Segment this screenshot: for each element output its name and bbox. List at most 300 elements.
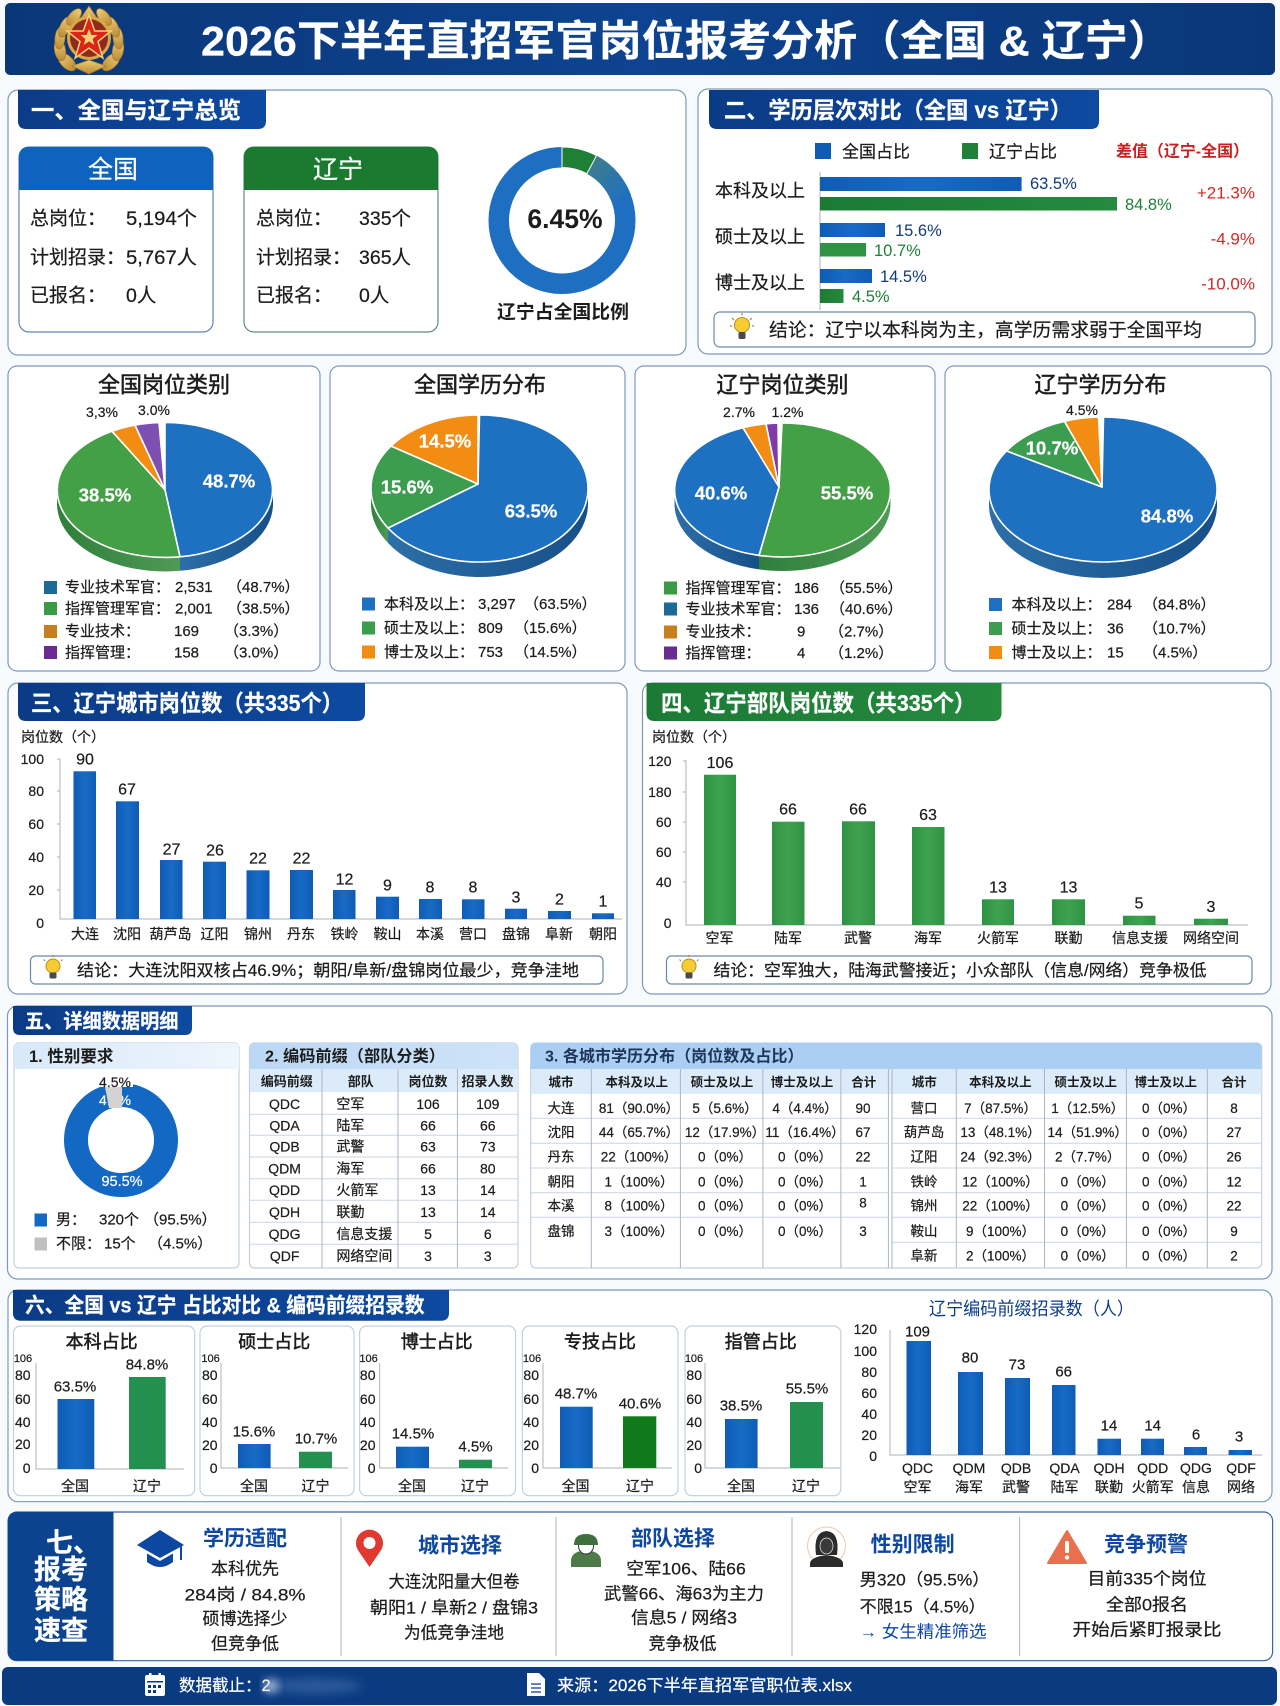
bar chart: Liaoning recruitment by code prefix: 40 bbox=[861, 1406, 877, 1422]
chart card: command share: 指管占比 bbox=[725, 1332, 797, 1352]
sub-panel: city education table: 81（90.0%） bbox=[599, 1101, 679, 1116]
card: national totals: 计划招录： bbox=[30, 246, 125, 268]
panel: national education distribution pie bbox=[330, 366, 625, 671]
sub-panel: code prefix table: 武警 bbox=[336, 1139, 364, 1155]
chart card: master share: 15.6% bbox=[233, 1424, 275, 1440]
card: national totals: 已报名： bbox=[30, 284, 106, 306]
bar chart: Liaoning recruitment by code prefix: 陆军 bbox=[1050, 1479, 1078, 1495]
bar chart: Liaoning recruitment by code prefix: QDD bbox=[1137, 1460, 1168, 1476]
bar chart: force job counts: 3 bbox=[1207, 899, 1216, 916]
donut chart: gender: 4.5% bbox=[99, 1074, 131, 1090]
sub-panel: code prefix table: 63 bbox=[420, 1139, 436, 1155]
chart card: doctor share: 106 bbox=[359, 1353, 378, 1365]
sub-panel: city education table: 0（0%） bbox=[1142, 1101, 1196, 1116]
sub-panel: city education table: 2（100%） bbox=[966, 1248, 1035, 1264]
bar chart: Liaoning recruitment by code prefix: 66 bbox=[1055, 1364, 1072, 1380]
pie chart: national education: 15.6% bbox=[381, 476, 433, 498]
icon: location pin bbox=[356, 1530, 383, 1567]
bar chart: Liaoning recruitment by code prefix: QDF bbox=[1226, 1460, 1256, 1476]
chart card: doctor share: 博士占比 bbox=[401, 1332, 473, 1352]
sub-panel: city education table: 22 bbox=[855, 1150, 871, 1164]
legend: national job categories: （48.7%） bbox=[227, 579, 300, 596]
chart card: master share: 40 bbox=[202, 1414, 218, 1430]
column: force choice: 空军106、陆66 bbox=[626, 1560, 746, 1578]
column: city choice: 朝阳1 / 阜新2 / 盘锦3 bbox=[370, 1598, 538, 1618]
panel: share comparison and code prefix recruitment bbox=[8, 1290, 1272, 1502]
chart card: bachelor share: 80 bbox=[15, 1367, 31, 1383]
sub-panel: gender requirement bbox=[14, 1043, 239, 1268]
bar chart: city job counts: 大连 bbox=[71, 926, 99, 942]
donut chart: gender: 4.5% bbox=[99, 1092, 131, 1108]
pie chart: national job categories: 3.0% bbox=[138, 402, 170, 418]
panel: Liaoning job categories pie bbox=[635, 366, 935, 671]
sub-panel: city education table: 1 bbox=[859, 1174, 867, 1190]
legend: Liaoning education: 36 bbox=[1107, 620, 1124, 638]
legend: national education: 本科及以上： bbox=[384, 596, 474, 613]
sub-panel: code prefix table: 13 bbox=[420, 1182, 436, 1198]
heading: section two bbox=[709, 90, 1099, 129]
bar chart: city job counts: 本溪 bbox=[416, 926, 444, 942]
sub-panel: city education table: 本科及以上 bbox=[969, 1075, 1032, 1090]
column: competition warning: 目前335个岗位 bbox=[1088, 1570, 1206, 1588]
donut chart: gender: 95.5% bbox=[101, 1174, 143, 1190]
bar chart: Liaoning recruitment by code prefix: 14 bbox=[1144, 1418, 1161, 1434]
card: Liaoning totals: 辽宁 bbox=[313, 156, 363, 184]
sub-panel: code prefix table: 66 bbox=[480, 1117, 496, 1133]
icon: light bulb bbox=[730, 313, 754, 339]
sub-panel: city education table: 8（100%） bbox=[604, 1198, 674, 1214]
column: competition warning: 竞争预警 bbox=[1104, 1534, 1188, 1556]
legend: national job categories: 169 bbox=[174, 623, 199, 640]
panel: education level comparison bbox=[698, 89, 1272, 354]
panel: Liaoning city job counts bbox=[8, 683, 627, 994]
chart card: technical share: 60 bbox=[523, 1391, 539, 1407]
chart card: bachelor share: 全国 bbox=[61, 1478, 89, 1494]
sub-panel: gender requirement: 1. 性别要求 bbox=[29, 1047, 114, 1066]
bar chart: city job counts: 铁岭 bbox=[330, 926, 358, 942]
sub-panel: code prefix table: 2. 编码前缀（部队分类） bbox=[265, 1046, 445, 1066]
chart card: doctor share: 0 bbox=[368, 1460, 376, 1476]
sub-panel: city education table: 22 bbox=[1226, 1198, 1242, 1214]
sub-panel: city education table: 0（0%） bbox=[1142, 1248, 1196, 1264]
legend: national education: （63.5%） bbox=[524, 596, 597, 613]
bar chart: Liaoning recruitment by code prefix: 武警 bbox=[1002, 1479, 1030, 1495]
panel: detailed data bbox=[8, 1006, 1272, 1279]
sub-panel: code prefix table: QDG bbox=[269, 1226, 301, 1242]
sub-panel: city education table: 5（5.6%） bbox=[692, 1101, 758, 1116]
bar chart: force job counts bbox=[648, 753, 1248, 946]
sub-panel: city education table: 0（0%） bbox=[778, 1174, 832, 1190]
bar chart: city job counts: 8 bbox=[426, 880, 435, 896]
sub-panel: city education table: 0（0%） bbox=[1142, 1150, 1196, 1164]
pie chart: Liaoning education: 10.7% bbox=[1026, 438, 1078, 458]
bar chart: city job counts: 盘锦 bbox=[502, 926, 530, 942]
pie chart: Liaoning education bbox=[989, 402, 1217, 578]
chart card: technical share: 106 bbox=[523, 1353, 541, 1365]
donut chart: Liaoning share: 6.45% bbox=[527, 204, 603, 234]
legend: national education: 809 bbox=[478, 620, 503, 637]
chart card: master share: 硕士占比 bbox=[238, 1332, 310, 1352]
icon: graduation cap bbox=[137, 1530, 184, 1567]
card: Liaoning totals: 365人 bbox=[359, 247, 411, 269]
sub-panel: city education table: 0（0%） bbox=[1142, 1198, 1196, 1214]
column: force choice: 部队选择 bbox=[631, 1528, 715, 1550]
legend: national job categories: 指挥管理军官： bbox=[65, 600, 170, 618]
donut chart: Liaoning share bbox=[499, 147, 631, 284]
bar chart: education comparison: 63.5% bbox=[1030, 175, 1077, 193]
panel: Liaoning force job counts bbox=[642, 683, 1271, 994]
bar chart: city job counts: 40 bbox=[28, 849, 44, 865]
bar chart: city job counts: 葫芦岛 bbox=[150, 926, 192, 942]
bar chart: force job counts: 0 bbox=[664, 915, 672, 931]
chart card: command share: 38.5% bbox=[720, 1398, 762, 1414]
legend: 辽宁占比 bbox=[989, 142, 1057, 162]
chart card: bachelor share: 40 bbox=[15, 1414, 31, 1430]
sub-panel: city education table: 硕士及以上 bbox=[1054, 1075, 1117, 1090]
column: gender limit: 不限15（4.5%） bbox=[860, 1598, 986, 1616]
callout: conclusion on forces bbox=[666, 955, 1252, 984]
bar chart: force job counts: 13 bbox=[1060, 880, 1078, 896]
chart card: command share: 55.5% bbox=[786, 1380, 828, 1398]
chart card: master share: 0 bbox=[210, 1460, 218, 1476]
bar chart: education comparison: 硕士及以上 bbox=[715, 227, 805, 247]
sub-panel: code prefix table: 14 bbox=[480, 1204, 496, 1220]
sub-panel: city education table: 0（0%） bbox=[778, 1150, 832, 1164]
legend: Liaoning education: 博士及以上： bbox=[1012, 644, 1102, 662]
chart card: technical share: 全国 bbox=[562, 1478, 590, 1494]
chart card: bachelor share: 20 bbox=[15, 1436, 31, 1452]
sub-panel: city education table: 0（0%） bbox=[1142, 1125, 1196, 1140]
callout: conclusion on cities: 结论：大连沈阳双核占46.9%；朝阳/阜新/盘锦岗位最少，竞争洼地 bbox=[77, 961, 579, 980]
heading: section seven: 速查 bbox=[34, 1616, 88, 1646]
legend: gender bbox=[34, 1212, 217, 1252]
sub-panel: city education table: 硕士及以上 bbox=[691, 1075, 753, 1090]
bar chart: Liaoning recruitment by code prefix: 80 bbox=[962, 1350, 978, 1366]
legend: Liaoning education bbox=[989, 596, 1216, 662]
column: force choice: 武警66、海63为主力 bbox=[604, 1584, 764, 1604]
axis title: 岗位数（个） bbox=[652, 729, 736, 745]
callout: conclusion on cities bbox=[30, 955, 603, 984]
sub-panel: city education table: 27 bbox=[1226, 1125, 1242, 1140]
sub-panel: code prefix table: 14 bbox=[480, 1182, 496, 1198]
chart card: technical share: 专技占比 bbox=[564, 1332, 636, 1352]
panel: national and Liaoning overview bbox=[8, 90, 686, 355]
chart card: master share: 全国 bbox=[240, 1478, 268, 1494]
bar chart: city job counts: 100 bbox=[21, 751, 44, 767]
legend: national education: 博士及以上： bbox=[384, 644, 474, 661]
legend: gender: 不限： bbox=[56, 1236, 101, 1252]
sub-panel: city education table: 24（92.3%） bbox=[960, 1150, 1041, 1164]
legend: Liaoning job categories: 186 bbox=[794, 580, 819, 597]
sub-panel: city education table: 鞍山 bbox=[910, 1224, 938, 1239]
bar chart: city job counts: 阜新 bbox=[545, 926, 573, 942]
sub-panel: city education table: 阜新 bbox=[910, 1248, 938, 1264]
bar chart: education comparison: 本科及以上 bbox=[715, 181, 805, 201]
bar chart: Liaoning recruitment by code prefix: 0 bbox=[869, 1448, 877, 1464]
bar chart: force job counts: 40 bbox=[656, 874, 672, 890]
data cutoff text: 数据截止：2 bbox=[179, 1676, 271, 1695]
chart card: doctor share: 全国 bbox=[398, 1478, 426, 1494]
column: education fit: 硕博选择少 bbox=[202, 1610, 288, 1628]
sub-panel: city education table: 0（0%） bbox=[698, 1174, 752, 1190]
legend: national job categories: 专业技术军官： bbox=[65, 579, 170, 596]
chart card: doctor share: 20 bbox=[360, 1437, 376, 1453]
sub-panel: city education table: 0（0%） bbox=[778, 1198, 832, 1214]
sub-panel: code prefix table: 岗位数 bbox=[408, 1074, 448, 1089]
sub-panel: code prefix table: 编码前缀 bbox=[261, 1074, 313, 1089]
legend: Liaoning education: （84.8%） bbox=[1143, 596, 1216, 614]
chart card: master share bbox=[200, 1326, 354, 1496]
legend: national job categories: （3.0%） bbox=[224, 644, 288, 662]
bar chart: Liaoning recruitment by code prefix bbox=[854, 1299, 1262, 1495]
column: competition warning: 全部0报名 bbox=[1106, 1596, 1188, 1614]
chart card: master share: 106 bbox=[201, 1353, 220, 1365]
heading: section seven: 策略 bbox=[34, 1585, 88, 1615]
sub-panel: city education table: 朝阳 bbox=[548, 1174, 574, 1190]
sub-panel: code prefix table: 信息支援 bbox=[336, 1226, 392, 1242]
chart card: doctor share bbox=[359, 1326, 516, 1496]
bar chart: education comparison: -10.0% bbox=[1201, 274, 1255, 294]
bar chart: Liaoning recruitment by code prefix: QDG bbox=[1180, 1460, 1212, 1476]
sub-panel: code prefix table: 3 bbox=[484, 1248, 492, 1264]
sub-panel: city education table: 2（7.7%） bbox=[1055, 1150, 1120, 1164]
sub-panel: code prefix table: 6 bbox=[484, 1226, 492, 1242]
heading: section five: 五、详细数据明细 bbox=[25, 1010, 178, 1033]
card: Liaoning totals: 335个 bbox=[359, 208, 411, 230]
legend: Liaoning education: 本科及以上： bbox=[1012, 596, 1102, 614]
legend: gender: 男： bbox=[56, 1212, 86, 1228]
heading: section one: 一、全国与辽宁总览 bbox=[31, 97, 241, 123]
chart card: command share: 80 bbox=[686, 1367, 702, 1383]
column: city choice: 城市选择 bbox=[418, 1534, 502, 1558]
chart card: bachelor share: 本科占比 bbox=[66, 1332, 138, 1352]
legend: Liaoning job categories: 专业技术军官： bbox=[686, 601, 791, 618]
sub-panel: city education table: 辽阳 bbox=[910, 1150, 938, 1164]
sub-panel: code prefix table: QDF bbox=[270, 1248, 299, 1264]
legend: Liaoning job categories: （2.7%） bbox=[829, 624, 893, 640]
chart card: command share: 0 bbox=[694, 1460, 702, 1476]
sub-panel: city education table: 3 bbox=[859, 1224, 867, 1239]
sub-panel: code prefix table: 80 bbox=[480, 1160, 496, 1176]
column: competition warning bbox=[1048, 1531, 1222, 1640]
sub-panel: city education table: 0（0%） bbox=[1061, 1198, 1115, 1214]
callout: conclusion on forces: 结论：空军独大，陆海武警接近；小众部队（信息/网络）竞争极低 bbox=[714, 961, 1206, 980]
legend: national job categories: 2,531 bbox=[175, 579, 213, 596]
heading: section four: 四、辽宁部队岗位数（共335个） bbox=[661, 690, 976, 716]
bar chart: force job counts: 联勤 bbox=[1054, 930, 1082, 946]
column: city choice: 大连沈阳量大但卷 bbox=[388, 1572, 520, 1592]
bar chart: Liaoning recruitment by code prefix: 14 bbox=[1101, 1418, 1117, 1434]
card: Liaoning totals: 0人 bbox=[359, 285, 389, 307]
sub-panel: code prefix table: QDM bbox=[268, 1160, 301, 1176]
sub-panel: code prefix table: QDD bbox=[269, 1182, 300, 1198]
chart card: doctor share: 60 bbox=[360, 1391, 376, 1407]
sub-panel: code prefix table: 109 bbox=[476, 1096, 500, 1112]
axis title: 岗位数（个） bbox=[21, 729, 105, 745]
bar chart: city job counts: 90 bbox=[76, 752, 94, 768]
sub-panel: city education table: 本溪 bbox=[548, 1198, 575, 1214]
sub-panel: code prefix table: 3 bbox=[424, 1248, 432, 1264]
sub-panel: city education table: 3. 各城市学历分布（岗位数及占比） bbox=[545, 1046, 804, 1066]
pie chart: Liaoning job categories: 40.6% bbox=[695, 482, 747, 504]
bar chart: Liaoning recruitment by code prefix: 辽宁编码前缀招录数（人） bbox=[929, 1299, 1134, 1319]
chart card: master share: 辽宁 bbox=[302, 1478, 330, 1494]
sub-panel: city education table: 22（100%） bbox=[962, 1198, 1039, 1214]
sub-panel: code prefix table: QDC bbox=[269, 1096, 300, 1112]
column: education fit: 学历适配 bbox=[203, 1526, 287, 1550]
bar chart: city job counts: 2 bbox=[555, 892, 564, 908]
chart card: command share: 全国 bbox=[727, 1478, 755, 1494]
sub-panel: city education table: 0（0%） bbox=[1061, 1248, 1115, 1264]
bar chart: Liaoning recruitment by code prefix: QDH bbox=[1093, 1460, 1125, 1476]
chart card: command share: 60 bbox=[686, 1391, 702, 1407]
sub-panel: city education table: 盘锦 bbox=[548, 1223, 574, 1239]
pie chart: national education: 63.5% bbox=[505, 500, 557, 522]
sub-panel: code prefix table: 106 bbox=[416, 1096, 440, 1112]
column: education fit bbox=[137, 1526, 306, 1654]
sub-panel: city education table: 7（87.5%） bbox=[964, 1101, 1037, 1116]
bar chart: Liaoning recruitment by code prefix: 火箭军 bbox=[1132, 1479, 1174, 1495]
legend: Liaoning job categories bbox=[664, 580, 903, 662]
bar chart: education comparison: 博士及以上 bbox=[715, 273, 805, 293]
sub-panel: code prefix table: 5 bbox=[424, 1226, 432, 1242]
sub-panel: code prefix table: QDH bbox=[269, 1204, 300, 1220]
legend: Liaoning job categories: 4 bbox=[797, 645, 805, 662]
bar chart: education comparison: 10.7% bbox=[874, 242, 921, 260]
chart card: technical share: 20 bbox=[523, 1437, 539, 1453]
sub-panel: city education table: 博士及以上 bbox=[771, 1075, 833, 1090]
bar chart: city job counts: 20 bbox=[28, 882, 44, 898]
bar chart: city job counts: 27 bbox=[163, 842, 180, 858]
bar chart: force job counts: 60 bbox=[656, 814, 672, 830]
card: national totals: 全国 bbox=[88, 156, 138, 184]
bar chart: Liaoning recruitment by code prefix: QDC bbox=[902, 1460, 933, 1476]
bar chart: force job counts: 陆军 bbox=[774, 930, 802, 946]
legend: Liaoning job categories: 9 bbox=[797, 624, 805, 640]
bar chart: city job counts: 朝阳 bbox=[589, 926, 617, 942]
sub-panel: city education table: 0（0%） bbox=[1061, 1174, 1115, 1190]
bar chart: force job counts: 信息支援 bbox=[1112, 930, 1168, 946]
bar chart: city job counts bbox=[21, 751, 622, 942]
icon: light bulb bbox=[680, 955, 698, 978]
legend: Liaoning education: 15 bbox=[1107, 644, 1124, 662]
chart card: technical share: 0 bbox=[531, 1460, 539, 1476]
bar chart: Liaoning recruitment by code prefix: 联勤 bbox=[1095, 1479, 1123, 1495]
chart card: master share: 10.7% bbox=[295, 1430, 337, 1448]
bar chart: education comparison: 84.8% bbox=[1125, 196, 1172, 214]
sub-panel: code prefix table: 火箭军 bbox=[336, 1182, 378, 1198]
bar chart: city job counts: 60 bbox=[28, 816, 44, 832]
legend: Liaoning education: （10.7%） bbox=[1143, 620, 1216, 638]
sub-panel: city education table: 城市 bbox=[912, 1075, 937, 1090]
legend: Liaoning education: （4.5%） bbox=[1143, 644, 1207, 662]
bar chart: city job counts: 26 bbox=[206, 842, 224, 860]
chart card: command share: 40 bbox=[686, 1414, 702, 1430]
chart card: doctor share: 40 bbox=[360, 1414, 376, 1430]
pie chart: Liaoning education: 84.8% bbox=[1141, 506, 1193, 526]
pie chart: Liaoning job categories: 1.2% bbox=[772, 404, 803, 420]
column: education fit: 284岗 / 84.8% bbox=[184, 1586, 306, 1604]
sub-panel: city education table: 博士及以上 bbox=[1134, 1075, 1197, 1090]
icon: document bbox=[527, 1673, 545, 1696]
card: national totals: 5,194个 bbox=[126, 208, 197, 230]
card: Liaoning totals: 已报名： bbox=[256, 284, 332, 306]
heading: section two: 二、学历层次对比（全国 vs 辽宁） bbox=[724, 97, 1072, 123]
callout: conclusion on education bbox=[714, 312, 1255, 347]
sub-panel: city education table: 8 bbox=[1230, 1101, 1238, 1116]
card: Liaoning totals: 计划招录： bbox=[256, 246, 351, 268]
legend: national job categories: 专业技术： bbox=[65, 623, 140, 640]
bar chart: force job counts: 120 bbox=[648, 753, 672, 769]
source text: 来源：2026下半年直招军官职位表.xlsx bbox=[557, 1676, 853, 1695]
icon: military emblem bbox=[53, 6, 125, 74]
sub-panel: city education table: 0（0%） bbox=[698, 1150, 752, 1164]
sub-panel: code prefix table: 海军 bbox=[336, 1160, 364, 1176]
donut chart: gender bbox=[76, 1074, 166, 1190]
sub-panel: city education table: 1（100%） bbox=[604, 1174, 674, 1190]
sub-panel: city education table: 0（0%） bbox=[698, 1198, 752, 1214]
bar chart: education comparison: +21.3% bbox=[1197, 184, 1255, 202]
bar chart: force job counts: 63 bbox=[919, 807, 937, 824]
bar chart: Liaoning recruitment by code prefix: 海军 bbox=[955, 1479, 983, 1495]
pie chart: Liaoning education: 4.5% bbox=[1066, 402, 1098, 418]
icon: warning triangle bbox=[1048, 1531, 1086, 1563]
bar chart: city job counts: 67 bbox=[118, 782, 136, 798]
column: competition warning: 开始后紧盯报录比 bbox=[1072, 1620, 1222, 1640]
legend: gender: （4.5%） bbox=[148, 1236, 212, 1252]
bar chart: education comparison: 15.6% bbox=[895, 222, 942, 240]
pie chart: Liaoning job categories: 2.7% bbox=[723, 404, 755, 420]
bar chart: force job counts: 106 bbox=[707, 755, 733, 772]
sub-panel: code prefix table: 66 bbox=[420, 1117, 436, 1133]
sub-panel: city education table: 锦州 bbox=[910, 1198, 938, 1214]
card: Liaoning totals bbox=[244, 147, 438, 332]
chart card: bachelor share: 辽宁 bbox=[133, 1478, 161, 1494]
legend: national job categories: 158 bbox=[174, 644, 199, 662]
chart card: bachelor share: 0 bbox=[23, 1460, 31, 1476]
chart card: bachelor share: 84.8% bbox=[126, 1356, 168, 1374]
sub-panel: city education table: 12 bbox=[1226, 1174, 1242, 1190]
sub-panel: city education table: 3（100%） bbox=[604, 1224, 674, 1239]
bar chart: Liaoning recruitment by code prefix: 信息 bbox=[1182, 1479, 1210, 1495]
bar chart: city job counts: 9 bbox=[383, 878, 392, 894]
sub-panel: city education table: 铁岭 bbox=[910, 1174, 938, 1190]
chart card: command share bbox=[685, 1326, 841, 1496]
bar chart: city job counts: 80 bbox=[28, 783, 44, 799]
icon: light bulb bbox=[44, 955, 62, 978]
chart card: master share: 60 bbox=[202, 1391, 218, 1407]
legend: Liaoning job categories: （55.5%） bbox=[830, 580, 903, 597]
chart card: technical share: 辽宁 bbox=[626, 1478, 654, 1494]
legend: national education: 753 bbox=[478, 644, 503, 661]
bar chart: force job counts: 火箭军 bbox=[977, 930, 1019, 946]
panel: national job categories pie bbox=[8, 366, 320, 671]
sub-panel: city education table: 9（100%） bbox=[966, 1224, 1035, 1239]
pie chart: Liaoning job categories: 55.5% bbox=[821, 482, 873, 504]
card: national totals bbox=[19, 147, 213, 332]
sub-panel: city education table: 12（100%） bbox=[962, 1174, 1039, 1190]
bar chart: city job counts: 12 bbox=[336, 872, 354, 888]
legend: 全国占比 bbox=[842, 142, 910, 162]
legend: national education: （15.6%） bbox=[514, 620, 587, 637]
bar chart: city job counts: 辽阳 bbox=[200, 926, 228, 942]
heading: section four bbox=[646, 683, 1002, 721]
column: force choice bbox=[571, 1528, 764, 1654]
bar chart: city job counts: 沈阳 bbox=[113, 926, 141, 942]
icon: calendar bbox=[145, 1673, 165, 1696]
bar chart: force job counts: 空军 bbox=[706, 930, 734, 946]
chart card: command share: 106 bbox=[685, 1353, 703, 1365]
